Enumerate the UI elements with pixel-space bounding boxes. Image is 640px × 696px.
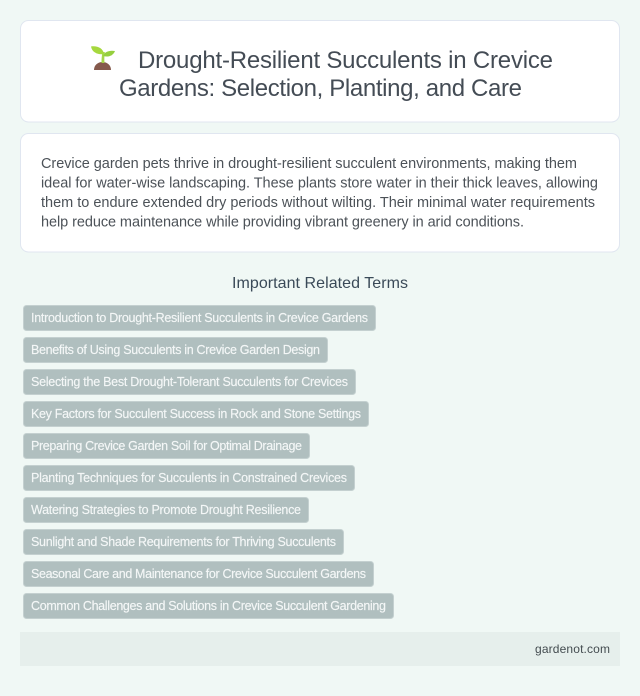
footer: gardenot.com: [535, 642, 610, 656]
title: [119, 47, 553, 102]
chip: introduction: Introduction to Drought-Resilient Succulents in Crevice Gardens: [31, 311, 368, 325]
text block: description: Crevice garden pets thrive in drought-resilient succulent environments, making them: [41, 156, 577, 172]
chip: sunlight: [24, 530, 344, 554]
heading: related terms: Important Related Terms: [232, 275, 408, 292]
chip: challenges: [24, 594, 394, 618]
chip: soil: Preparing Crevice Garden Soil for Optimal Drainage: [31, 439, 302, 453]
chip: soil: [24, 434, 310, 458]
chip: selecting: Selecting the Best Drought-Tolerant Succulents for Crevices: [31, 375, 348, 389]
chip: key factors: [24, 402, 368, 426]
title: Drought-Resilient Succulents in Crevice: [138, 47, 553, 74]
chip: key factors: Key Factors for Succulent Success in Rock and Stone Settings: [31, 407, 361, 421]
panel: description card: [20, 134, 620, 252]
chip: benefits: Benefits of Using Succulents in Crevice Garden Design: [31, 343, 320, 357]
text block: description: [41, 156, 598, 230]
chip: watering: [24, 498, 308, 522]
chip: introduction: [24, 306, 376, 330]
chip: selecting: [24, 370, 356, 394]
text block: description: help reduce maintenance while providing vibrant greenery in arid conditions.: [41, 214, 524, 230]
chip: sunlight: Sunlight and Shade Requirements for Thriving Succulents: [31, 535, 336, 549]
text block: description: them to endure extended dry periods without wilting. Their minimal water requirements: [41, 195, 595, 211]
chip: planting: Planting Techniques for Succulents in Constrained Crevices: [31, 471, 347, 485]
chip: seasonal: Seasonal Care and Maintenance for Crevice Succulent Gardens: [31, 567, 366, 581]
icon: sprout: [91, 46, 115, 70]
footer: [20, 632, 620, 666]
chip: seasonal: [24, 562, 374, 586]
text block: description: ideal for water-wise landscaping. These plants store water in their thick leaves, allowing: [41, 176, 598, 192]
chip: watering: Watering Strategies to Promote Drought Resilience: [31, 503, 301, 517]
panel: title card: [20, 20, 620, 122]
list: related term chips: [24, 306, 394, 618]
chip: challenges: Common Challenges and Solutions in Crevice Succulent Gardening: [31, 599, 386, 613]
chip: benefits: [24, 338, 328, 362]
title: Gardens: Selection, Planting, and Care: [119, 75, 522, 102]
chip: planting: [24, 466, 354, 490]
